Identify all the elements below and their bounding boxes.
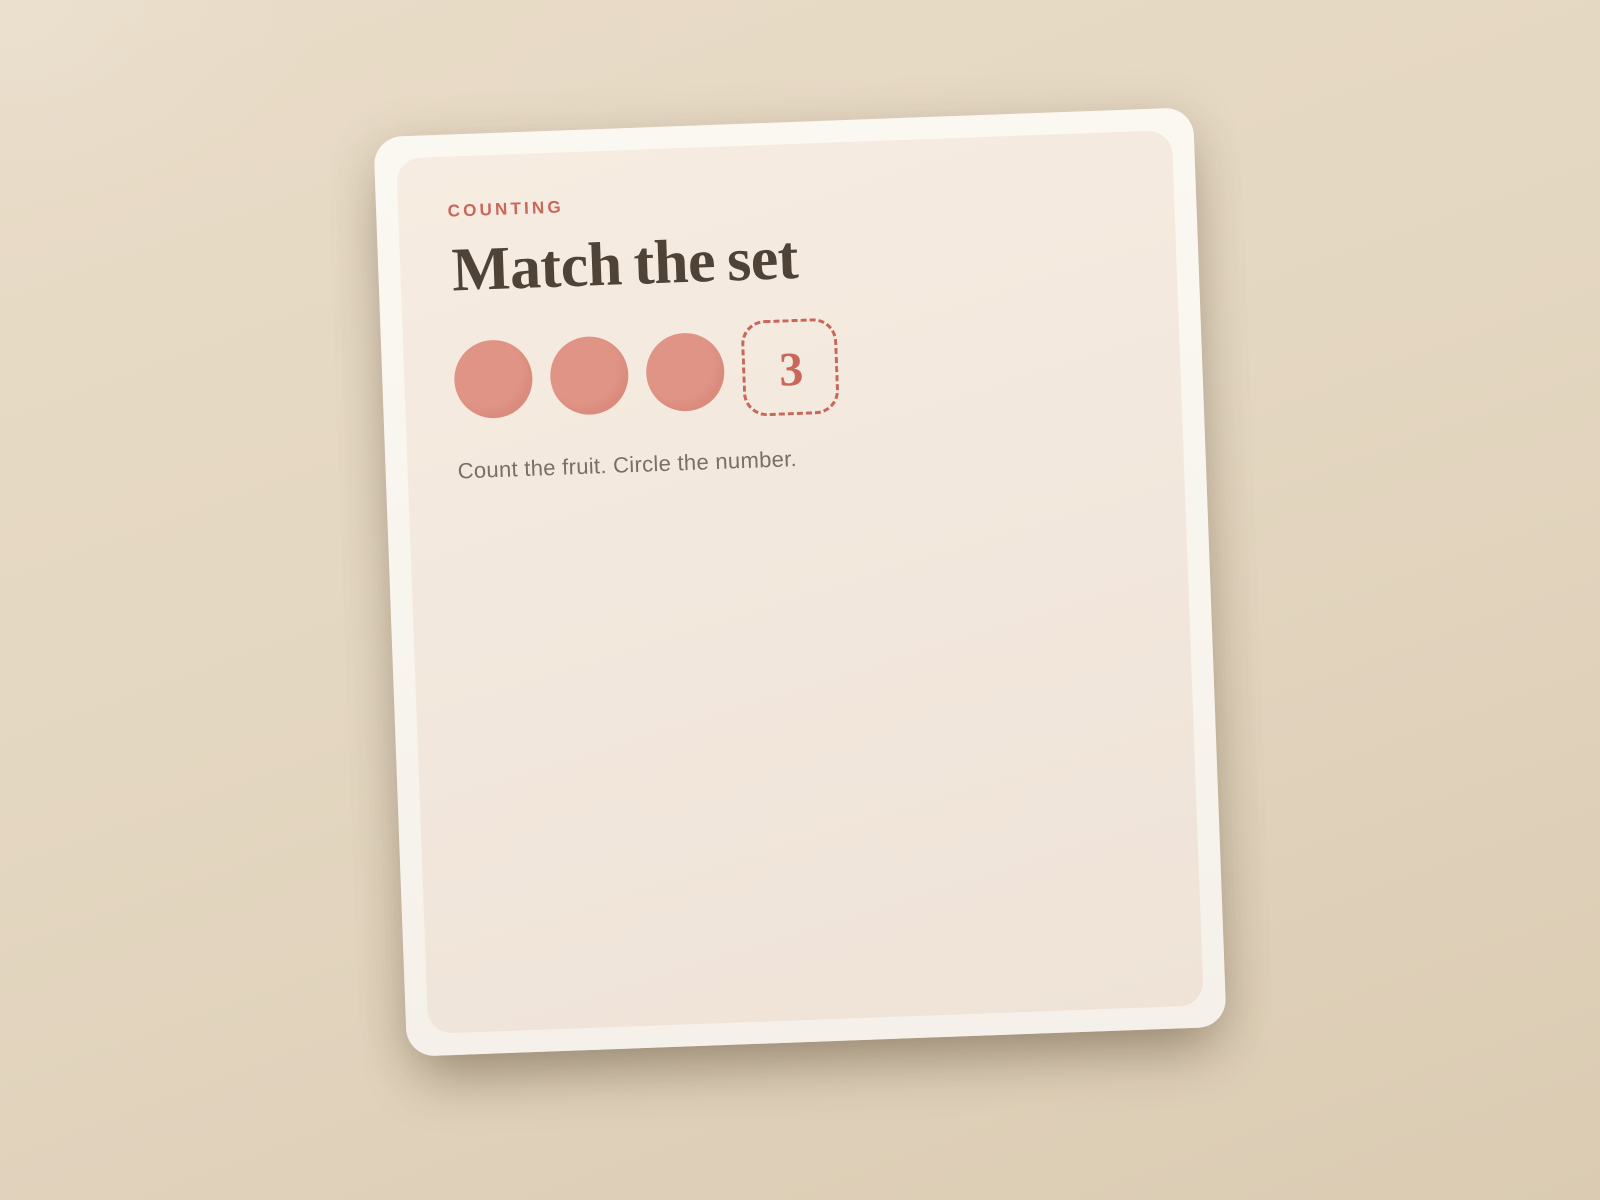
answer box outline [740, 317, 840, 416]
instruction text: Count the fruit. Circle the number. [457, 446, 797, 483]
title: Match the set [451, 223, 799, 304]
answer number: 3 [778, 342, 804, 396]
icon: fruit 1 [452, 338, 533, 419]
icon: fruit 2 [548, 335, 629, 416]
panel: worksheet card [373, 107, 1227, 1056]
icon: fruit 3 [644, 331, 725, 412]
panel: inner sheet [396, 130, 1204, 1033]
eyebrow label: COUNTING [447, 196, 564, 220]
